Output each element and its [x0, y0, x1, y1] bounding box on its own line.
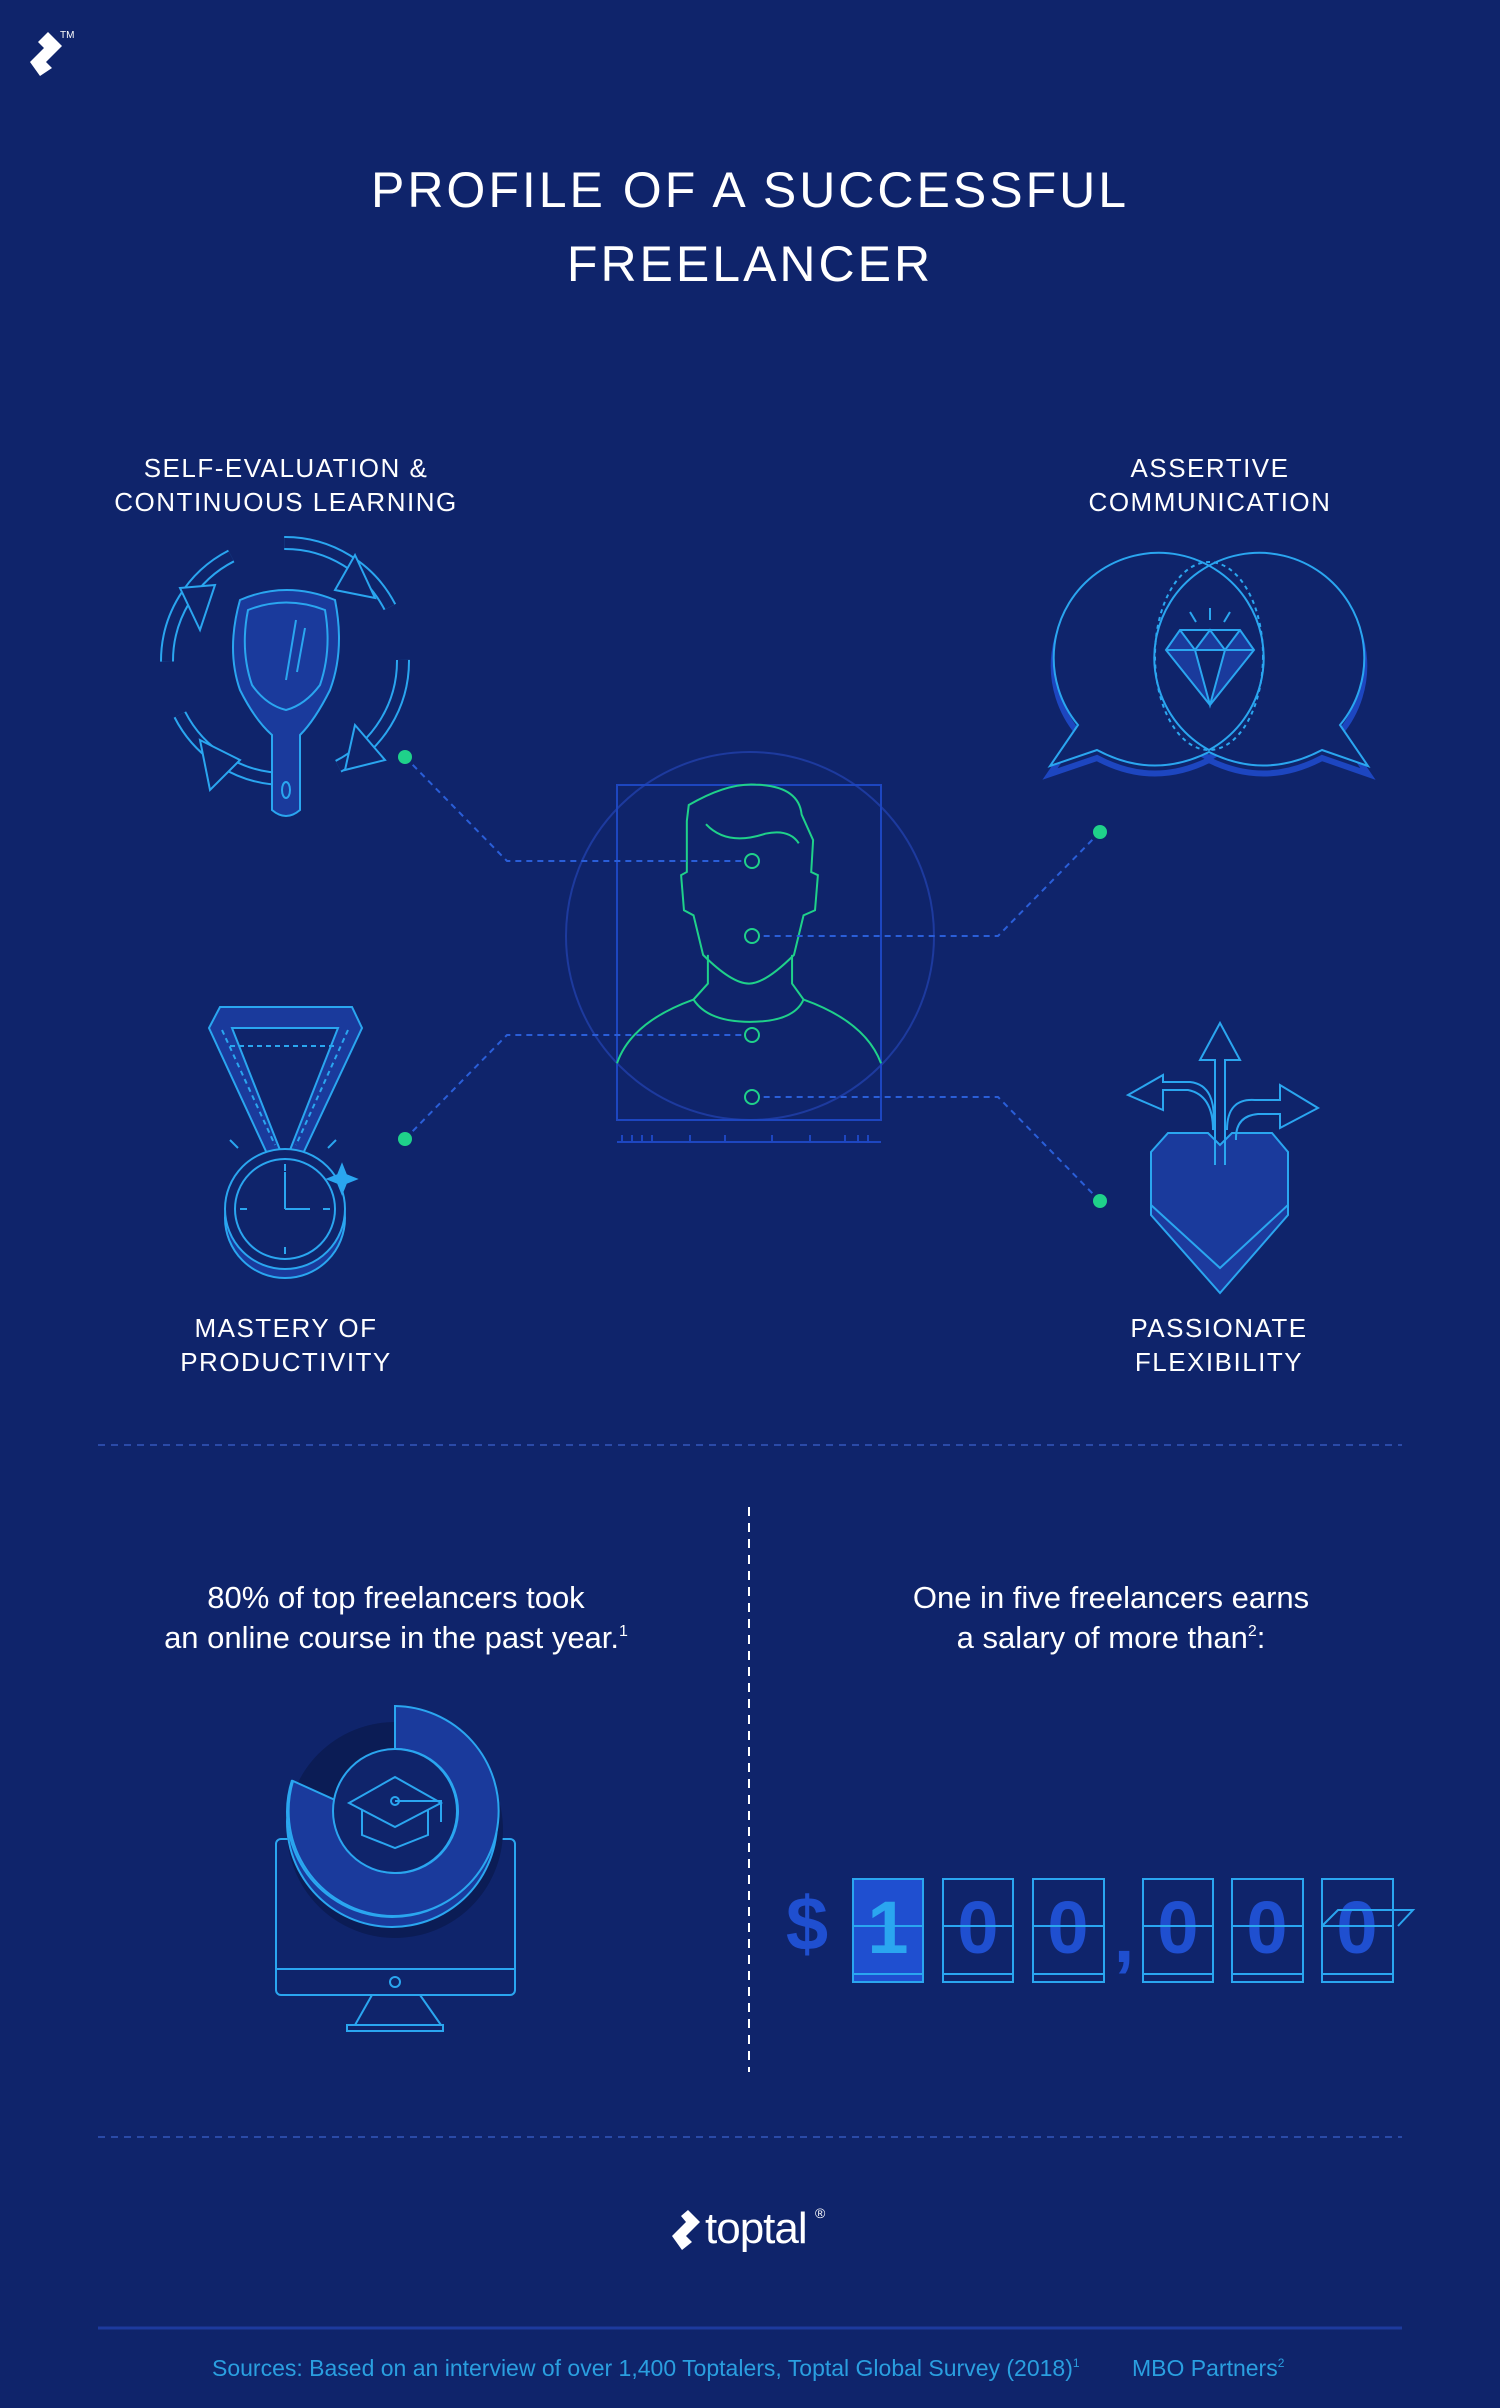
sources: 2 [1278, 2356, 1285, 2370]
icon: mirror with cycle arrows [167, 543, 403, 816]
logo: toptal footer: ® [815, 2205, 826, 2221]
label: self-evaluation [114, 453, 458, 517]
text: online course stat: 1 [619, 1623, 628, 1640]
label: mastery of productivity [180, 1313, 392, 1377]
label: assertive communication: COMMUNICATION [1089, 487, 1331, 517]
sources: 1 [1073, 2356, 1080, 2370]
title: PROFILE OF A SUCCESSFUL [371, 162, 1129, 218]
title [371, 162, 1129, 292]
logo: toptal footer [672, 2204, 826, 2253]
central figure: portrait frame [566, 752, 934, 1142]
label: mastery of productivity: PRODUCTIVITY [180, 1347, 392, 1377]
icon: monitor with donut chart [276, 1706, 515, 2031]
title: FREELANCER [567, 236, 933, 292]
text: salary stat [913, 1580, 1309, 1655]
label: passionate flexibility: PASSIONATE [1130, 1313, 1308, 1343]
label: assertive communication: ASSERTIVE [1131, 453, 1289, 483]
counter: $100,000: $ [786, 1882, 828, 1967]
counter: $100,000: 1 [867, 1886, 909, 1969]
icon: heart with arrows [1128, 1023, 1318, 1293]
icon: medal with stopwatch [209, 1007, 362, 1278]
label: assertive communication [1089, 453, 1331, 517]
connectors with markers [405, 757, 1100, 1201]
counter: $100,000: 0 [957, 1886, 999, 1969]
label: self-evaluation: SELF-EVALUATION & [144, 453, 428, 483]
text: salary stat: One in five freelancers earns [913, 1580, 1309, 1615]
text: online course stat: 80% of top freelancers took [207, 1580, 585, 1615]
sources: MBO Partners [1132, 2355, 1278, 2381]
logo: toptal mark top-left [30, 30, 74, 76]
counter: $100,000: 0 [1246, 1886, 1288, 1969]
logo: toptal footer: toptal [705, 2204, 807, 2253]
counter: $100,000: 0 [1157, 1886, 1199, 1969]
counter: $100,000: 0 [1047, 1886, 1089, 1969]
text: salary stat: a salary of more than [957, 1620, 1248, 1655]
counter: $100,000 [786, 1879, 1413, 1982]
icon: speech bubbles with diamond [1050, 553, 1368, 774]
sources: Sources: Based on an interview of over 1,400 Toptalers, Toptal Global Survey (2018) [212, 2355, 1073, 2381]
text: online course stat [164, 1580, 628, 1655]
text: salary stat: : [1257, 1620, 1265, 1655]
counter: $100,000: , [1114, 1895, 1134, 1978]
label: self-evaluation: CONTINUOUS LEARNING [114, 487, 458, 517]
counter: $100,000: 0 [1336, 1886, 1378, 1969]
label: mastery of productivity: MASTERY OF [194, 1313, 378, 1343]
text: salary stat: 2 [1248, 1623, 1257, 1640]
label: passionate flexibility [1130, 1313, 1308, 1377]
text: online course stat: an online course in the past year. [164, 1620, 619, 1655]
label: passionate flexibility: FLEXIBILITY [1135, 1347, 1303, 1377]
logo: toptal mark top-left: TM [60, 30, 74, 41]
